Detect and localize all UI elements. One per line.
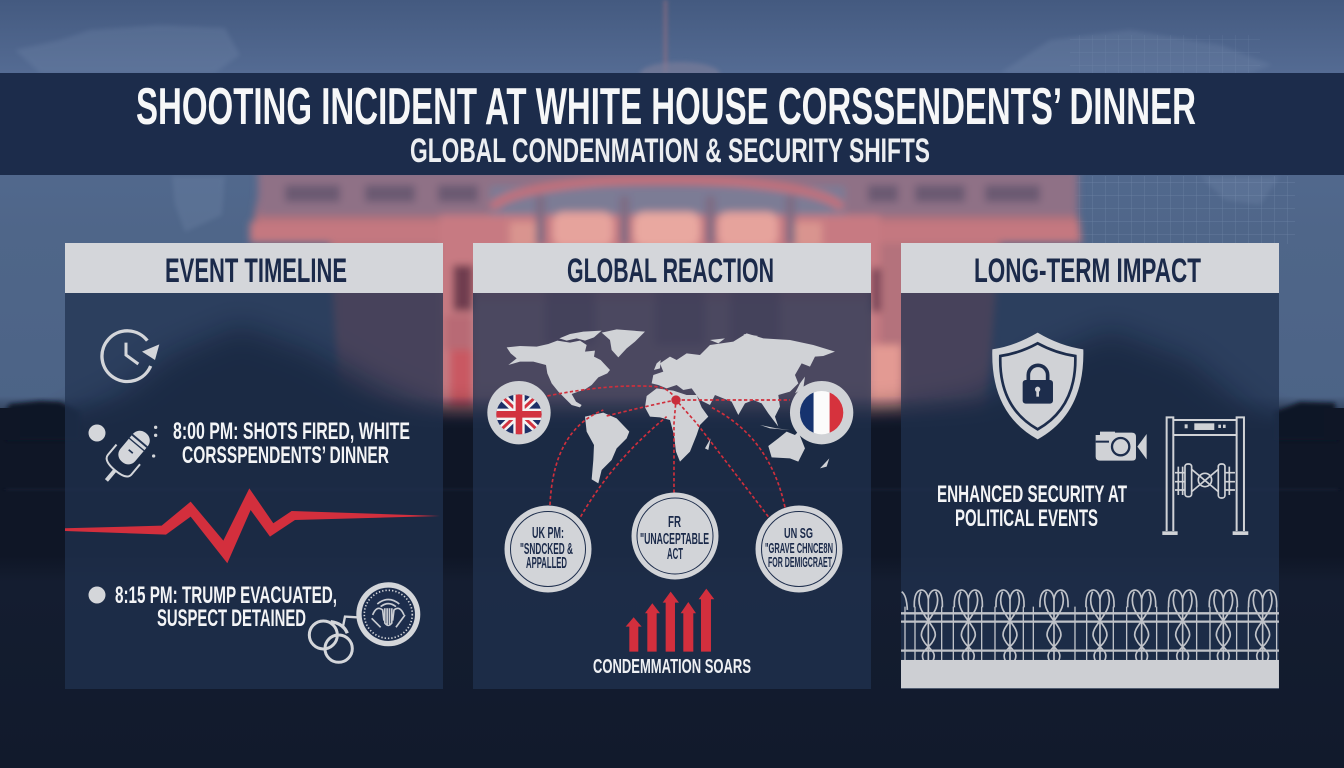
panel: long-term impact — [901, 243, 1279, 689]
quote bubble: FR: FR — [668, 514, 681, 531]
panel heading: event timeline — [65, 243, 443, 293]
quote bubble: UK PM: "SNDCKED & — [520, 541, 573, 558]
timeline text: 8:15 PM: 8:15 PM: TRUMP EVACUATED, — [115, 582, 337, 609]
icon: handcuffs — [309, 617, 357, 662]
subtitle: GLOBAL CONDENMATION & SECURITY SHIFTS — [410, 132, 930, 170]
body text: enhanced security — [937, 481, 1127, 532]
quote bubble: FR: "UNACEPTABLE — [640, 531, 709, 548]
caption: condemnation soars: CONDEMMATION SOARS — [593, 656, 751, 678]
background: White House — [250, 170, 1082, 420]
icon: metal detector gate — [1162, 417, 1248, 535]
panel heading: global reaction — [473, 243, 871, 293]
panel heading: long-term impact: LONG-TERM IMPACT — [974, 252, 1201, 290]
red rising arrows — [626, 589, 714, 652]
timeline text: 8:15 PM — [115, 582, 337, 632]
background: tree line silhouette — [0, 325, 1344, 768]
flag: France — [790, 381, 853, 444]
quote bubble: FR — [632, 492, 718, 580]
timeline text: 8:00 PM: CORSSPENDENTS’ DINNER — [182, 442, 389, 469]
background: antenna and dome — [640, 0, 720, 86]
quote bubble: UN SG: UN SG — [784, 525, 813, 542]
icon: clock with rotation arrow — [102, 331, 159, 382]
panel: global reaction — [473, 243, 871, 689]
timeline text: 8:15 PM: SUSPECT DETAINED — [157, 605, 306, 632]
red heartbeat line — [65, 488, 440, 563]
timeline text: 8:00 PM — [173, 418, 410, 469]
barbed wire fence — [901, 590, 1279, 688]
icon: microphone — [95, 423, 158, 490]
body text: enhanced security: ENHANCED SECURITY AT — [937, 481, 1127, 508]
quote bubble: UK PM — [504, 506, 592, 592]
quote bubble: UK PM: APPALLED — [526, 555, 567, 572]
timeline bullet 2 — [88, 586, 106, 604]
world map — [507, 329, 835, 483]
timeline bullet 1 — [88, 424, 106, 442]
body text: enhanced security: POLITICAL EVENTS — [955, 505, 1098, 532]
quote bubble: UK PM: UK PM: — [532, 525, 564, 542]
icon: presidential seal — [356, 582, 420, 646]
panel heading: global reaction: GLOBAL REACTION — [567, 252, 774, 290]
title banner — [0, 73, 1344, 175]
quote bubble: UN SG: "GRAVE CHNCE8N — [765, 540, 833, 557]
dashed connection arcs — [547, 386, 790, 517]
background: faint world maps — [15, 25, 1280, 232]
panel: event timeline — [65, 243, 443, 689]
quote bubble: UN SG: FOR DEMIGCRAET — [768, 554, 832, 571]
icon: shield with padlock — [992, 333, 1083, 439]
quote bubble: UN SG — [756, 506, 842, 592]
flag: United Kingdom — [487, 381, 551, 444]
icon: camera — [1096, 432, 1147, 461]
panel heading: long-term impact — [901, 243, 1279, 293]
quote bubble: FR: ACT — [667, 546, 683, 563]
timeline text: 8:00 PM: 8:00 PM: SHOTS FIRED, WHITE — [173, 418, 410, 445]
panel heading: event timeline: EVENT TIMELINE — [165, 252, 347, 290]
